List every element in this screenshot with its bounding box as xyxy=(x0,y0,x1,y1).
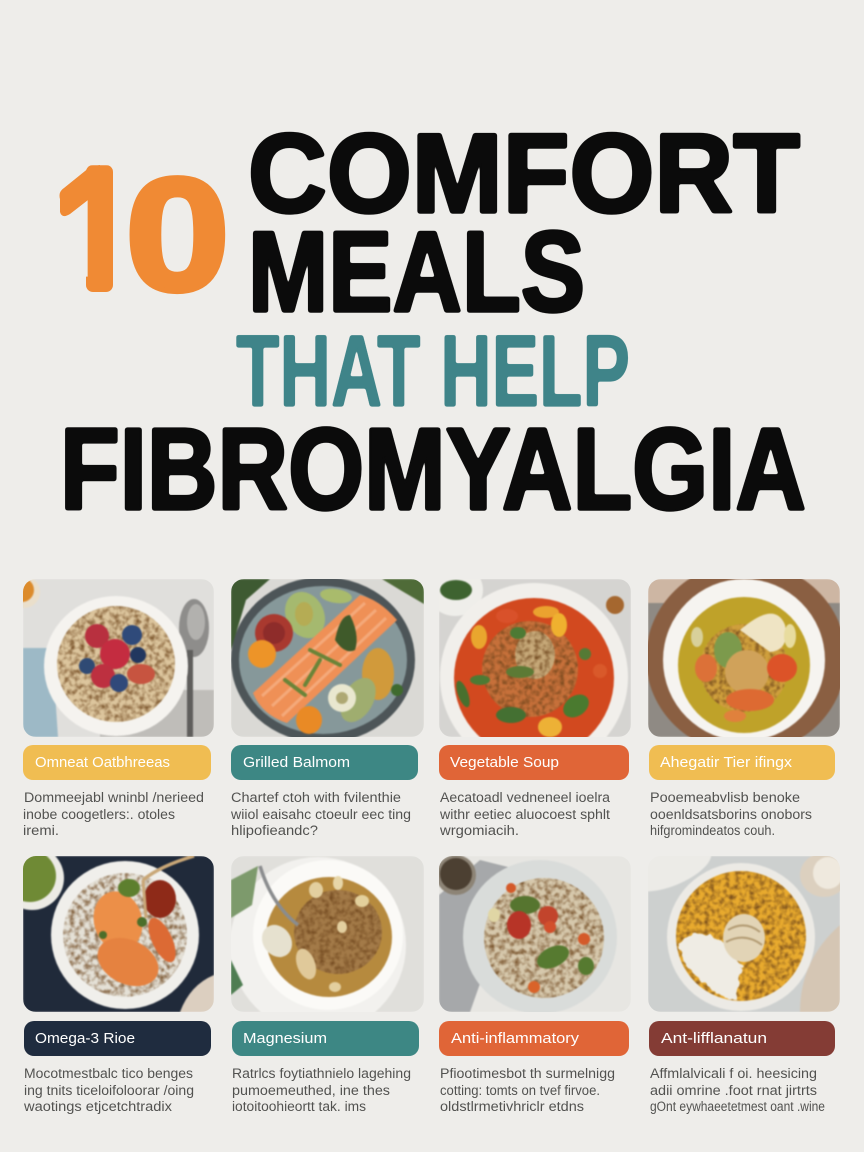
description: adii omrine .foot rnat jirtrts xyxy=(650,1083,817,1098)
description xyxy=(230,790,411,838)
photo: salmon over rice on dark table xyxy=(23,856,214,1012)
description: waotings etjcetchtradix xyxy=(23,1099,172,1114)
label pill xyxy=(649,745,835,780)
photo: oatmeal bowl with berries xyxy=(8,576,214,737)
photo: grain bowl with herbs and tomato xyxy=(436,855,631,1014)
card: grilled salmon xyxy=(230,577,424,838)
description: iremi. xyxy=(23,823,59,838)
label pill xyxy=(649,1021,835,1056)
photo: turmeric rice bowl xyxy=(648,856,840,1012)
description: hlipofieandc? xyxy=(231,823,318,838)
description: Dommeejabl wninbl /nerieed xyxy=(24,790,204,805)
card: anti-inflammatory xyxy=(436,855,631,1114)
card: omega-3 rice xyxy=(23,856,214,1114)
label pill: Omneat Oatbhreeas xyxy=(35,754,170,771)
description: Pfiootimesbot th surmelnigg xyxy=(440,1066,615,1081)
description: ooenldsatsborins onobors xyxy=(650,807,812,822)
title line: MEALS: MEALS xyxy=(248,209,585,336)
description: inobe coogetlers:. otoles xyxy=(23,807,175,822)
description: pumoemeuthed, ine thes xyxy=(232,1083,390,1098)
card: magnesium xyxy=(230,856,424,1114)
description xyxy=(232,1066,411,1114)
photo: salmon plate with vegetables xyxy=(231,577,424,743)
description: ing tnits ticeloifoloorar /oing xyxy=(24,1083,194,1098)
title number: 10 xyxy=(60,165,226,294)
description: wrgomiacih. xyxy=(439,823,519,838)
label pill xyxy=(439,1021,629,1056)
title line: COMFORT: COMFORT xyxy=(248,111,800,236)
label pill: Magnesium xyxy=(243,1030,327,1047)
label pill xyxy=(439,745,629,780)
description: oldstlrmetivhriclr etdns xyxy=(440,1099,584,1114)
title number: 10: 0 xyxy=(125,145,230,325)
label pill: Ant-lifflanatun xyxy=(661,1030,767,1047)
label pill xyxy=(231,745,418,780)
description: Pooemeabvlisb benoke xyxy=(650,790,800,805)
label pill: Ahegatir Tier ifingx xyxy=(660,754,793,771)
description: hifgromindeatos couh. xyxy=(650,823,775,838)
description xyxy=(440,1066,615,1114)
photo: tomato vegetable soup xyxy=(439,579,631,737)
description: gOnt eywhaeetetmest oant .wine xyxy=(650,1099,825,1114)
title xyxy=(60,132,805,512)
description: Ratrlcs foytiathnielo lagehing xyxy=(232,1066,411,1081)
card: turmeric rice xyxy=(648,856,840,1114)
label pill: Grilled Balmom xyxy=(243,754,350,771)
label pill xyxy=(232,1021,419,1056)
label pill: Anti-inflammatory xyxy=(451,1030,580,1047)
label pill xyxy=(24,1021,211,1056)
description: wiiol eaisahc ctoeulr eec ting xyxy=(230,807,411,822)
description xyxy=(439,790,611,838)
description xyxy=(650,790,812,838)
card: herb broth soup xyxy=(646,562,846,838)
description xyxy=(650,1066,825,1114)
description: Mocotmestbalc tico benges xyxy=(24,1066,193,1081)
description: iotoitoohieortt tak. ims xyxy=(232,1099,366,1114)
description: withr eetiec aluocoest sphlt xyxy=(439,807,610,822)
card: oatmeal xyxy=(8,576,214,838)
photo: golden broth on wooden board xyxy=(648,579,840,737)
description xyxy=(23,790,204,838)
label pill xyxy=(23,745,211,780)
description: Affmlalvicali f oi. heesicing xyxy=(650,1066,817,1081)
label pill: Omega-3 Rioe xyxy=(35,1030,135,1047)
description: cotting: tomts on tvef firvoe. xyxy=(440,1083,600,1098)
description xyxy=(23,1066,194,1114)
title line: THAT HELP: THAT HELP xyxy=(236,314,630,428)
label pill: Vegetable Soup xyxy=(450,754,559,771)
card: vegetable soup xyxy=(439,579,631,838)
title number: 10: 1 xyxy=(44,125,148,337)
photo: white-bean broth in white bowl xyxy=(231,856,424,1012)
description: Chartef ctoh with fvilenthie xyxy=(231,790,401,805)
description: Aecatoadl vedneneel ioelra xyxy=(440,790,611,805)
